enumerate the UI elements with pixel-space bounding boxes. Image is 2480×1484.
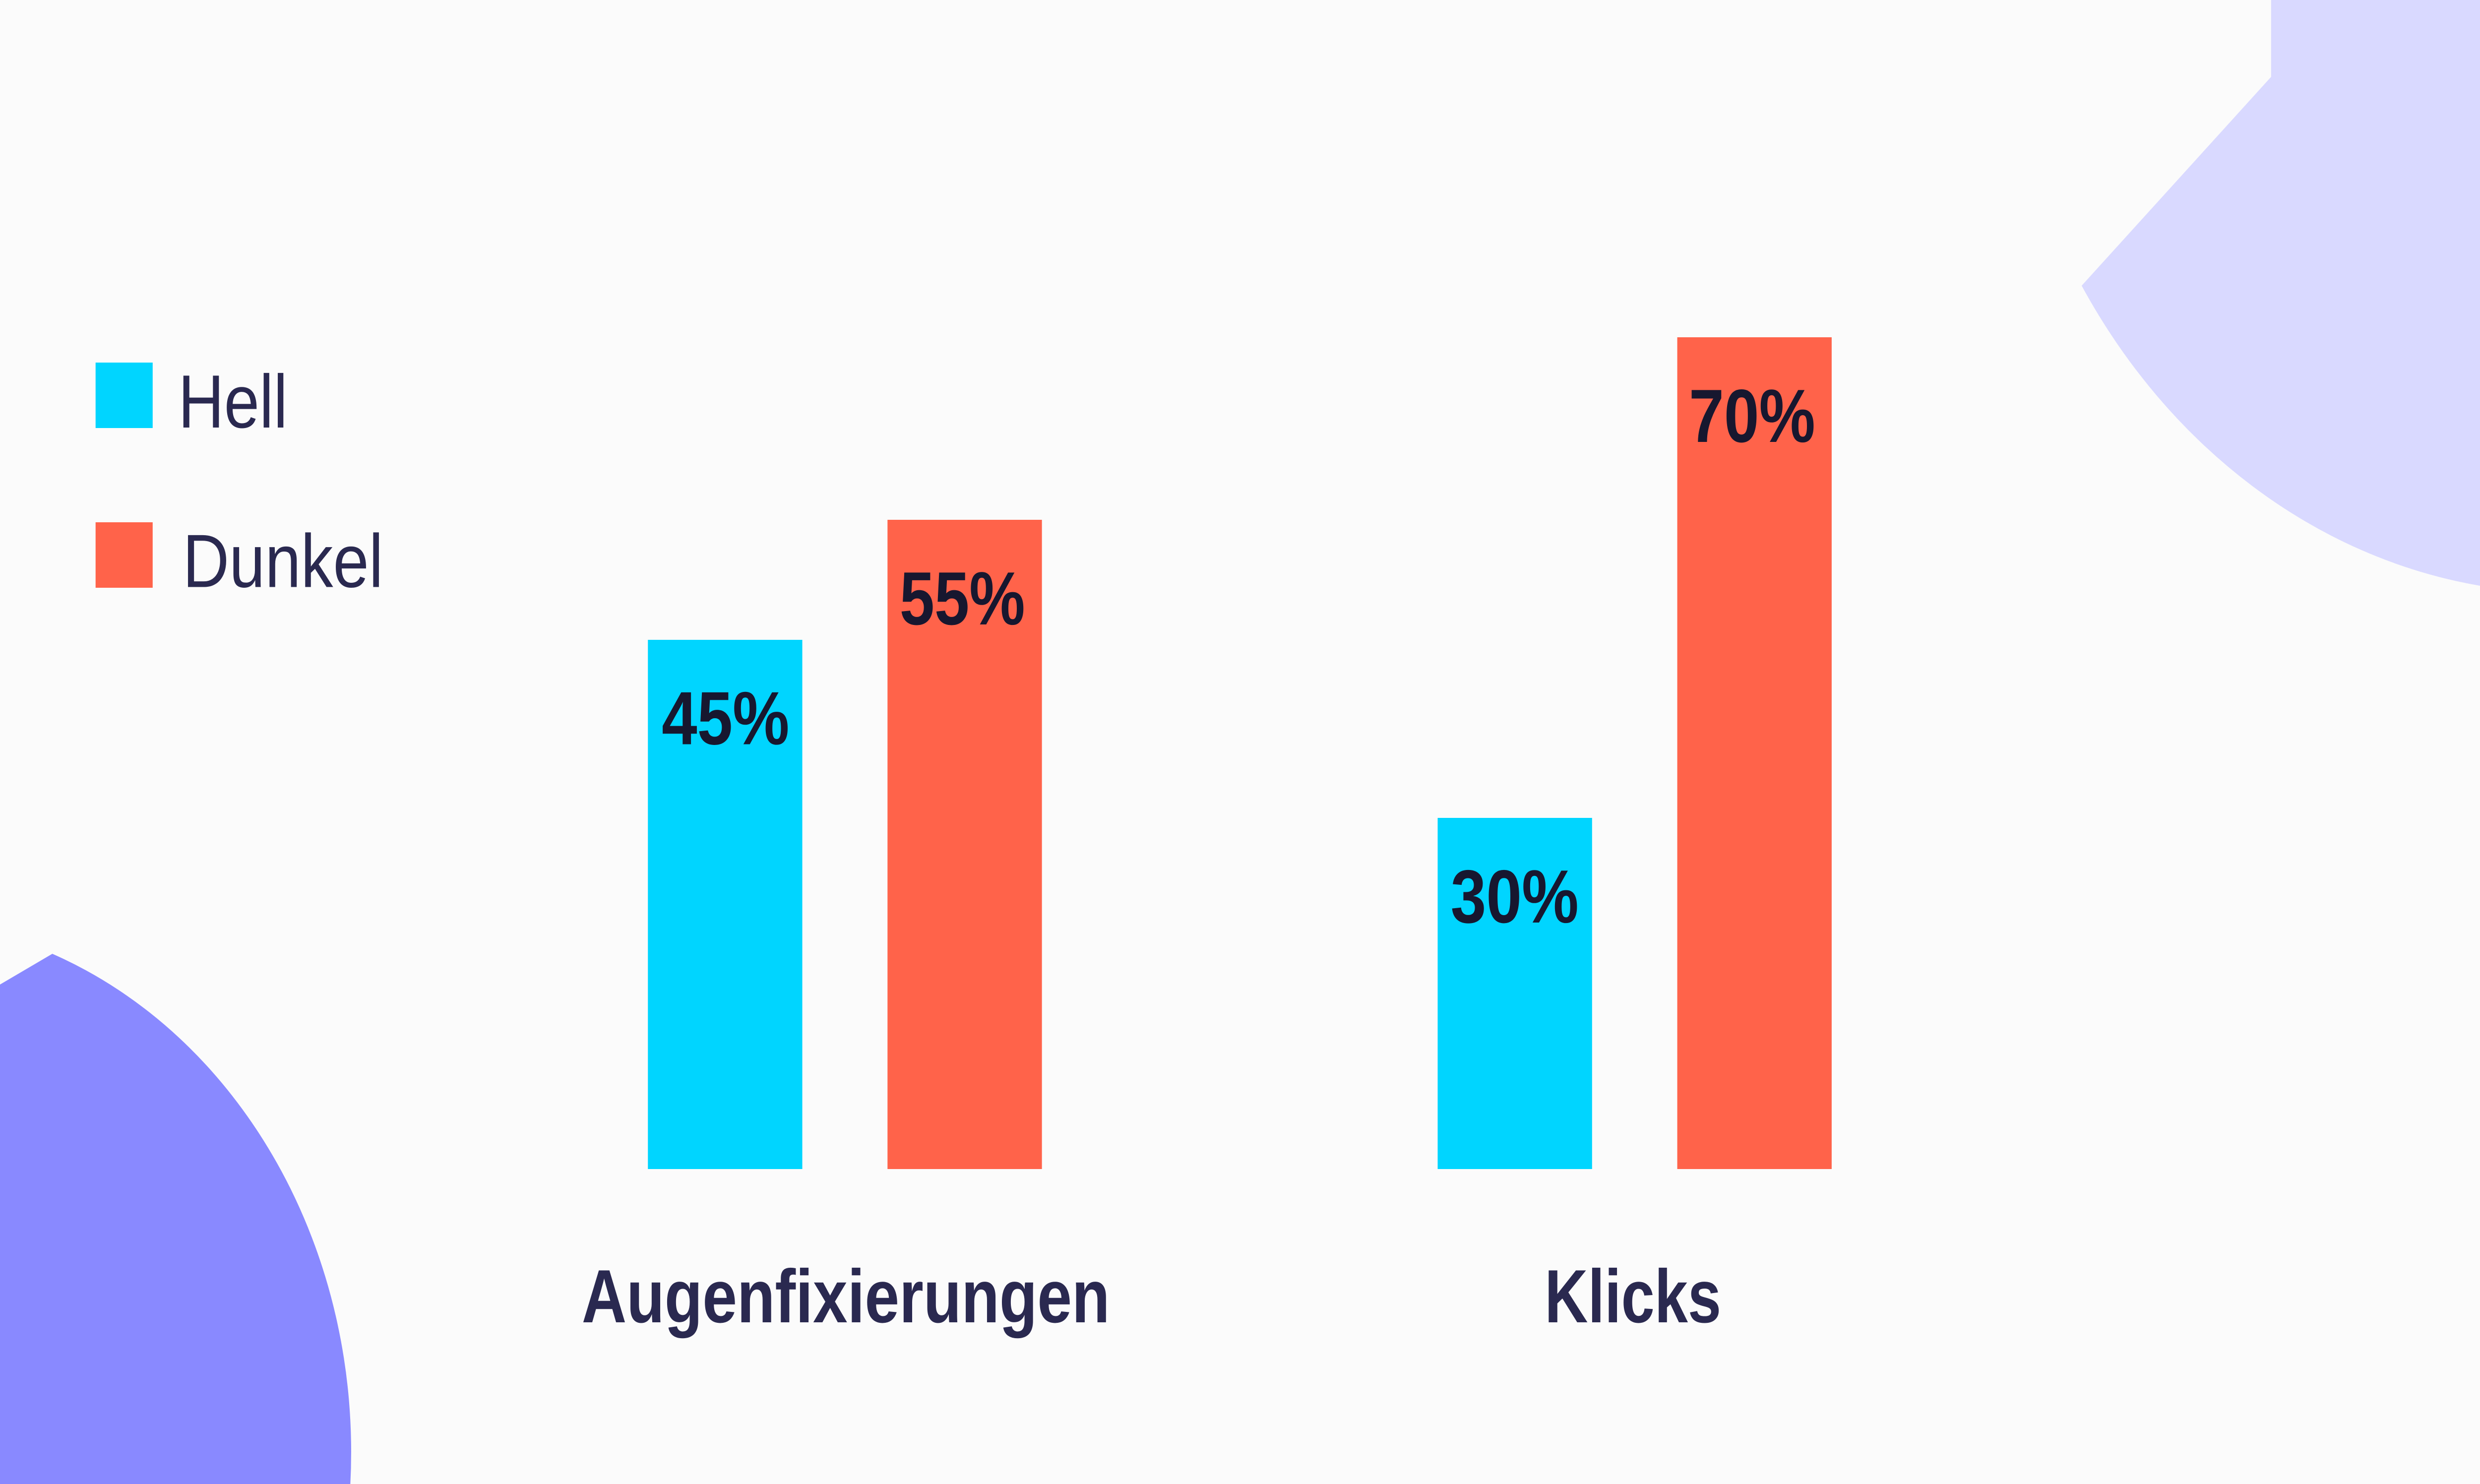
bar: Hell 45%: 45% [662,677,789,761]
axis label: Augenfixierungen: Augenfixierungen [582,1255,1110,1339]
bar: Dunkel 55%: 55% [900,557,1025,641]
bar: Hell 45% [648,640,803,1169]
legend [96,360,383,604]
decorative shape: bottom left purple [0,954,351,1484]
legend item: Hell [96,360,288,444]
bar: Dunkel 55% [887,520,1042,1169]
bar: Hell 30% [1438,818,1592,1169]
bar: Dunkel 70% [1677,337,1832,1169]
bar: Hell 30%: 30% [1451,855,1579,939]
decorative shape: top right lavender [2082,0,2480,586]
bar chart group: Augenfixierungen [582,520,1110,1339]
bar: Dunkel 70%: 70% [1689,374,1815,458]
bar chart group: Klicks [1438,337,1832,1339]
axis label: Klicks: Klicks [1545,1255,1721,1339]
legend item: Dunkel [96,519,383,604]
legend item: Hell: Hell [178,360,288,444]
legend item: Dunkel: Dunkel [183,519,383,604]
